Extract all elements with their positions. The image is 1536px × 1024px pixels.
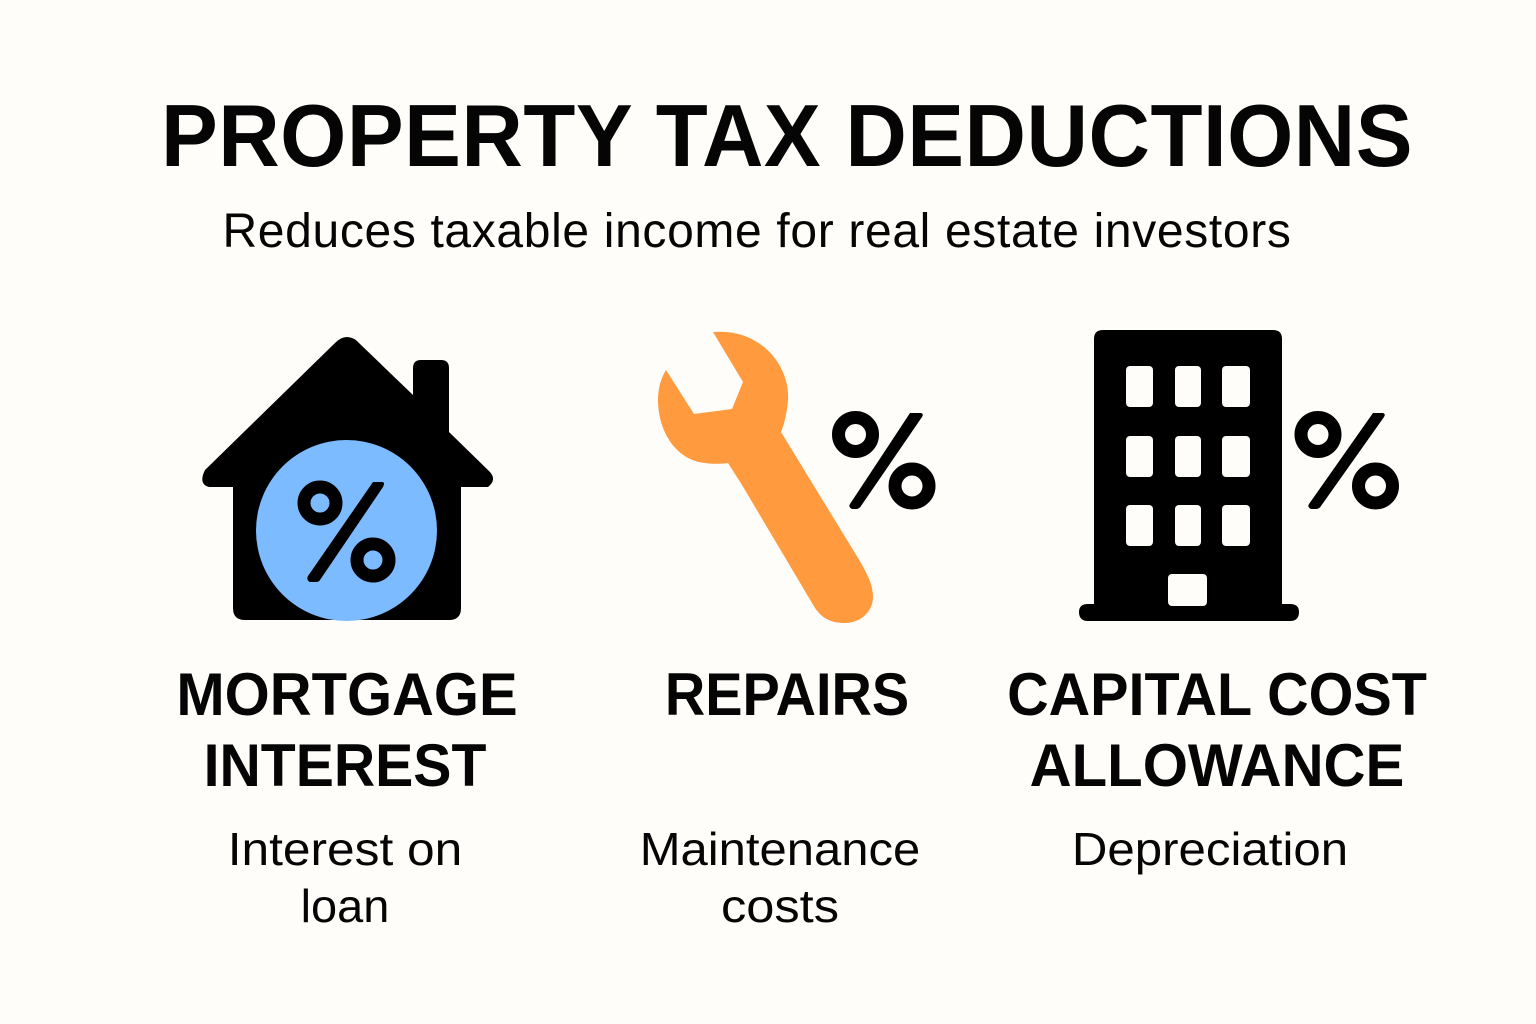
heading: capital cost allowance	[1007, 661, 1427, 799]
subtitle: Reduces taxable income for real estate investors	[222, 205, 1292, 258]
heading: mortgage interest: INTEREST	[204, 732, 486, 799]
icon: house with percent	[202, 337, 493, 621]
heading: repairs: REPAIRS	[665, 661, 909, 728]
description: interest on loan: loan	[301, 880, 389, 932]
icon: wrench with percent	[658, 332, 929, 623]
heading: mortgage interest	[176, 661, 518, 799]
description: maintenance costs: Maintenance	[640, 823, 920, 875]
heading: mortgage interest: MORTGAGE	[176, 661, 518, 728]
title: PROPERTY TAX DEDUCTIONS	[161, 86, 1413, 185]
heading: capital cost allowance: CAPITAL COST	[1007, 661, 1427, 728]
icon: office building with percent	[1079, 330, 1392, 621]
description: interest on loan: Interest on	[228, 823, 462, 875]
description: interest on loan	[228, 823, 462, 932]
heading: capital cost allowance: ALLOWANCE	[1030, 732, 1404, 799]
description: depreciation: Depreciation	[1072, 823, 1348, 875]
description: maintenance costs: costs	[721, 880, 839, 932]
description: maintenance costs	[640, 823, 920, 932]
